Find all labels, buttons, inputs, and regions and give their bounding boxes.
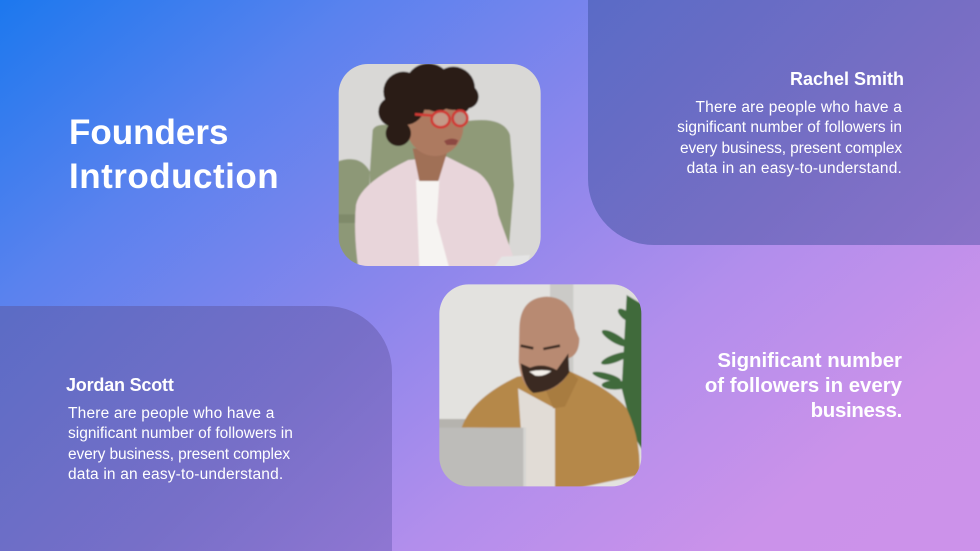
text: Jordan Scott bio [68, 405, 293, 483]
photo: woman with red glasses [338, 64, 541, 266]
callout: followers statement [705, 350, 902, 422]
text: Jordan Scott bio: significant number of followers in [68, 425, 293, 442]
title [69, 113, 279, 196]
callout: followers statement: Significant number [717, 350, 902, 372]
text: Rachel Smith bio: There are people who have a [696, 99, 902, 116]
panel: bottom left [0, 306, 392, 551]
callout: followers statement: business. [811, 400, 902, 422]
text: Rachel Smith bio: every business, present complex [680, 140, 902, 157]
title: Founders [69, 113, 228, 152]
photo: smiling man with laptop [439, 284, 642, 486]
text: Jordan Scott bio: There are people who have a [68, 405, 274, 422]
name: Rachel Smith: Rachel Smith [790, 69, 904, 89]
name: Jordan Scott: Jordan Scott [66, 375, 174, 395]
title: Introduction [69, 156, 279, 196]
panel: top right [588, 0, 980, 245]
text: Jordan Scott bio: data in an easy-to-understand. [68, 466, 283, 483]
callout: followers statement: of followers in every [705, 375, 902, 397]
text: Jordan Scott bio: every business, present complex [68, 446, 290, 463]
text: Rachel Smith bio: data in an easy-to-understand. [687, 160, 902, 177]
text: Rachel Smith bio: significant number of followers in [677, 119, 902, 136]
text: Rachel Smith bio [677, 99, 902, 177]
